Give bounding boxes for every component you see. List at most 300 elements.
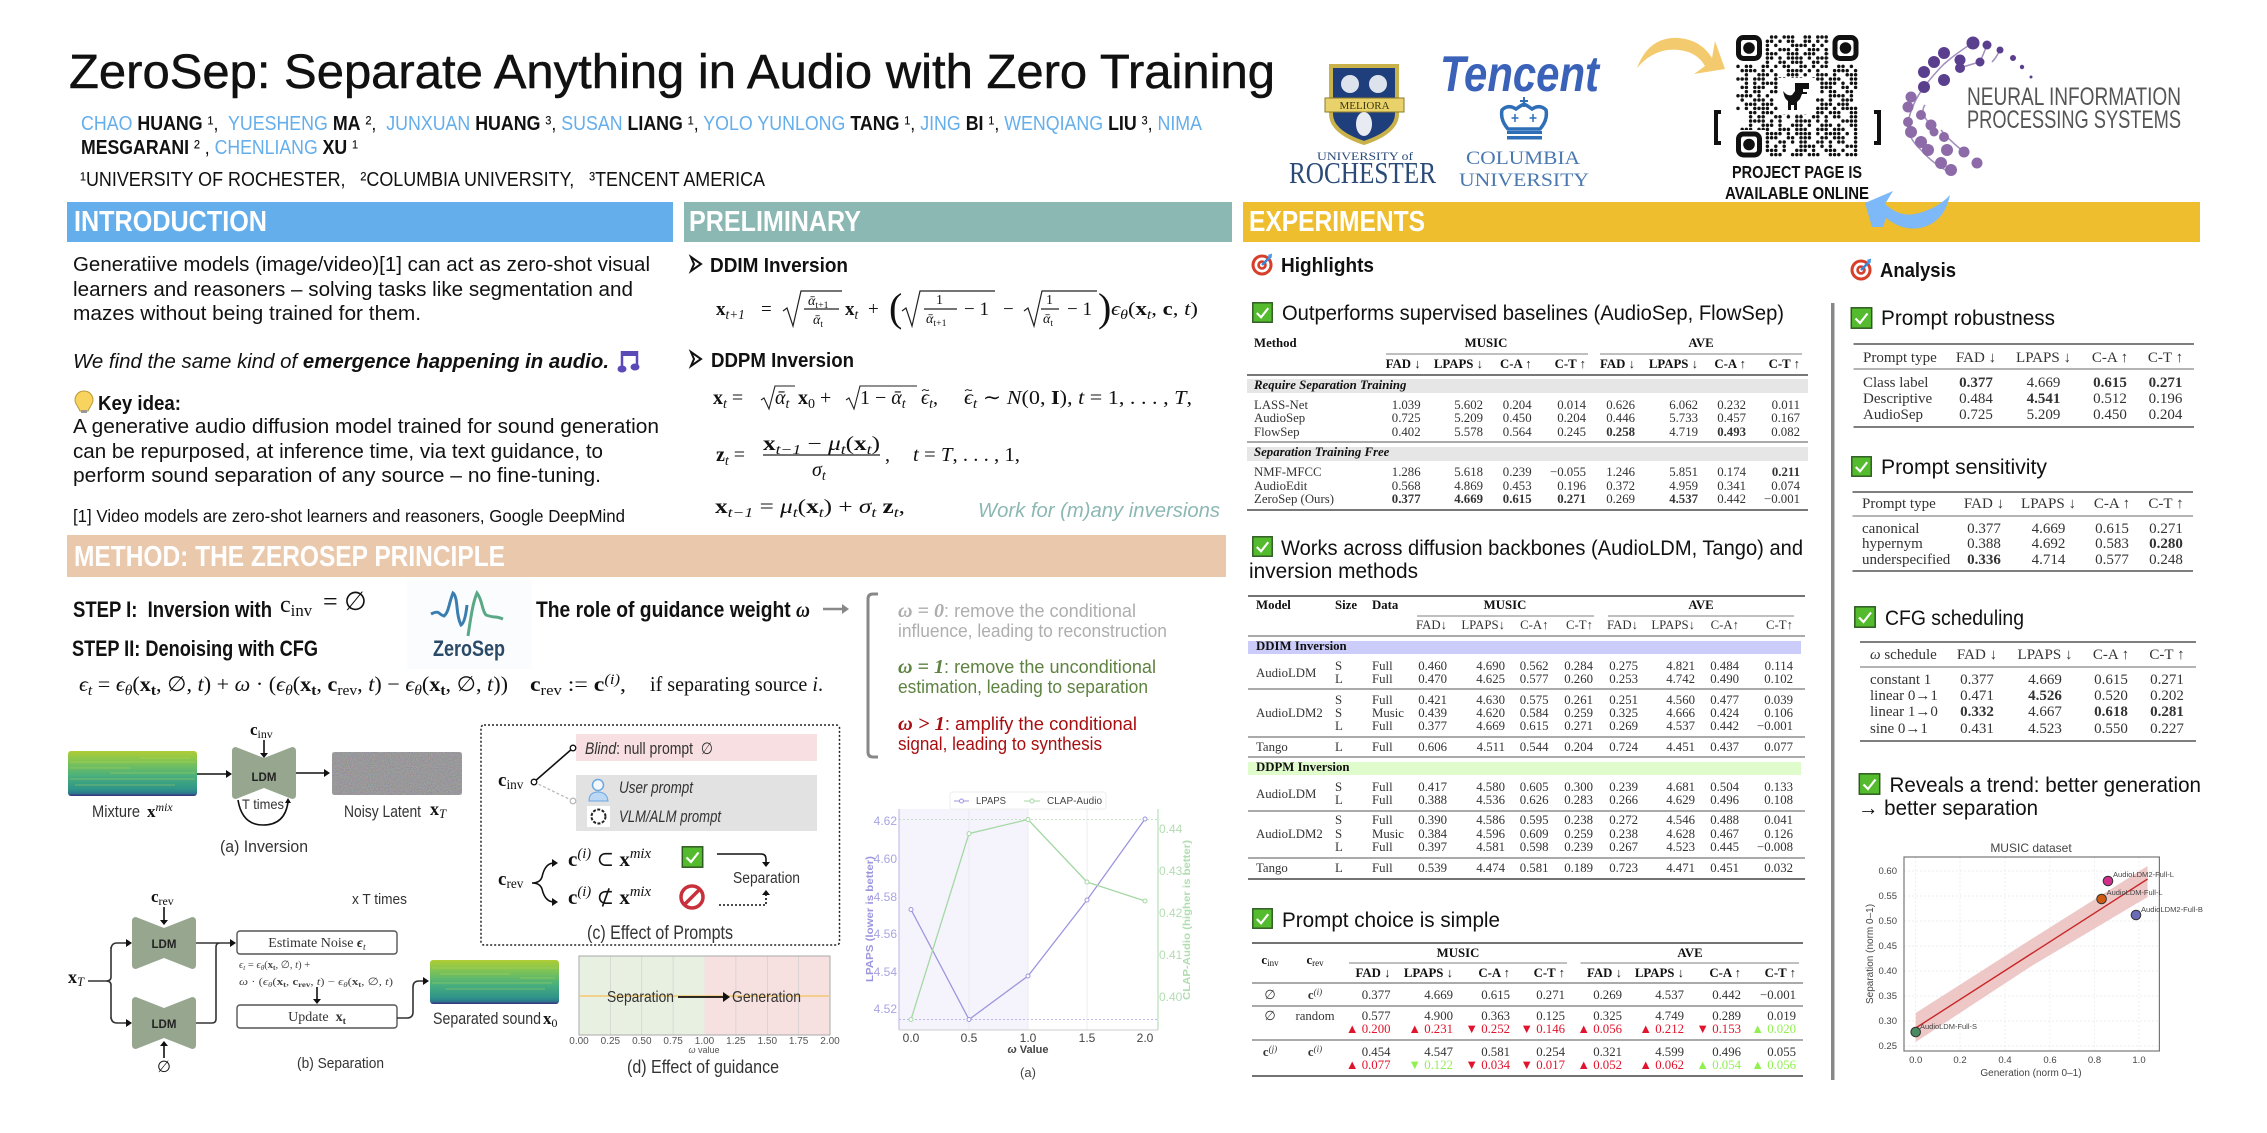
table: prompt sensitivity: Prompt type: [1862, 496, 1936, 512]
heading: introduction: INTRODUCTION: [74, 206, 267, 238]
table: backbones: L: [1335, 740, 1343, 754]
table: prompt choice: 0.577: [1362, 1009, 1391, 1023]
mixture spectrogram: [68, 751, 197, 796]
chart: effect of guidance: 0.75: [663, 1036, 683, 1047]
table: backbones: S: [1335, 780, 1342, 794]
chart: effect of guidance: 0.50: [632, 1036, 652, 1047]
logo: NeurIPS: PROCESSING SYSTEMS: [1967, 106, 2181, 134]
table: prompt robustness: 0.484: [1959, 391, 1993, 407]
table: backbones: 4.560: [1666, 693, 1695, 707]
table: baselines: 1.286: [1392, 465, 1421, 479]
table: backbones: 0.595: [1520, 813, 1548, 827]
callout: work for many inversions: Work for (m)any inversions: [978, 500, 1220, 522]
authors: MESGARANI ² , CHENLIANG XU ¹: [81, 137, 358, 159]
diagram: separation: x: [352, 977, 359, 988]
table: prompt choice: 0.442: [1712, 988, 1741, 1002]
table: baselines: 0.204: [1557, 411, 1587, 425]
diagram: separation: c: [151, 887, 159, 906]
chart: effect of guidance: 2.00: [820, 1036, 840, 1047]
table: prompt choice: c: [1306, 953, 1312, 967]
formula: z_t: x: [763, 433, 776, 455]
text block: key idea body: can be repurposed, at inference time, via text guidance, to: [73, 440, 603, 463]
table: backbones: 0.039: [1764, 693, 1793, 707]
table: backbones: 0.598: [1520, 840, 1548, 854]
formula: CFG: θ: [285, 683, 293, 699]
chart: MUSIC dataset scatter: AudioLDM2-Full-L: [2113, 870, 2174, 879]
table: backbones: 4.474: [1476, 861, 1506, 875]
table: prompt robustness: Prompt type: [1863, 350, 1937, 366]
table: CFG scheduling: 0.550: [2094, 721, 2128, 737]
table: backbones: Data: [1372, 598, 1399, 612]
diagram: separation: x: [277, 977, 284, 988]
panel: introduction: [67, 202, 673, 526]
table: backbones: 4.629: [1666, 793, 1695, 807]
diagram: effect of prompts: c: [568, 847, 577, 871]
diagram: effect of prompts: rev: [506, 876, 524, 891]
table: baselines: 0.232: [1717, 398, 1746, 412]
formula: x_t-1: (: [798, 496, 807, 518]
table: backbones: S: [1335, 827, 1342, 841]
table: baselines: FAD ↓: [1600, 357, 1635, 371]
table: baselines: 0.725: [1392, 411, 1421, 425]
table: backbones: 0.077: [1764, 740, 1794, 754]
diagram: effect of prompts: ⊄: [591, 885, 619, 909]
diagram: separation: (: [348, 977, 353, 988]
formula: DDIM: ϵ: [1111, 299, 1122, 320]
table: baselines: 0.082: [1771, 425, 1800, 439]
table: backbones: 0.390: [1418, 813, 1447, 827]
table: backbones: 0.504: [1710, 780, 1740, 794]
table: prompt choice: ▲ 0.077: [1346, 1058, 1391, 1072]
formula: CFG: ϵ: [116, 672, 126, 696]
table: prompt choice: ▲ 0.062: [1639, 1058, 1684, 1072]
table: backbones: [1248, 596, 1805, 879]
table: backbones: 0.477: [1710, 693, 1740, 707]
table: prompt choice: 4.547: [1424, 1045, 1454, 1059]
table: backbones: 0.283: [1564, 793, 1593, 807]
chart: MUSIC dataset scatter: 0.6: [2043, 1055, 2057, 1066]
text block: intro: mazes without being trained for them.: [73, 302, 421, 325]
table: backbones: 4.620: [1476, 706, 1505, 720]
table: backbones: Full: [1372, 813, 1393, 827]
table: backbones: 4.628: [1666, 827, 1695, 841]
formula: CFG: t: [88, 683, 93, 699]
formula: c_rev: c: [594, 672, 604, 696]
text: reference: [1] Video models are zero-shot learners and reasoners, Google DeepMind: [73, 506, 625, 526]
chart: MUSIC dataset scatter: [1865, 841, 2203, 1079]
guidance weight list: estimation, leading to separation: [898, 677, 1148, 697]
table: prompt choice: [1252, 943, 1803, 1076]
formula: x_t-1: t: [871, 506, 878, 521]
user and VLM prompt box: VLM/ALM prompt: [619, 808, 722, 826]
noisy latent: [332, 752, 462, 795]
text: step I: inv: [291, 601, 313, 620]
table: backbones: 0.239: [1609, 780, 1638, 794]
authors: CHAO HUANG ¹, YUESHENG MA ², JUNXUAN HUANG ³, SUSAN LIANG ¹, YOLO YUNLONG TANG ¹, JING BI ¹, WENQIANG LIU ³, NIMA: [81, 113, 1203, 135]
text block: key idea body: perform sound separation of any source – no fine-tuning.: [73, 464, 601, 487]
line: CLAP-Audio: [909, 818, 1147, 1022]
table: backbones: 0.417: [1418, 780, 1448, 794]
table: baselines: 0.014: [1557, 398, 1587, 412]
legend: CLAP-Audio: [1047, 795, 1102, 807]
table: CFG scheduling: 0.281: [2150, 704, 2184, 720]
formula: z_t: μ: [827, 433, 841, 455]
text: key idea: Key idea:: [98, 392, 181, 415]
chart: omega LPAPS and CLAP: (a): [1020, 1065, 1036, 1080]
diagram: separation: (: [264, 960, 268, 971]
table: baselines: ZeroSep (Ours): [1254, 492, 1334, 506]
table: backbones: 0.575: [1520, 693, 1548, 707]
table: baselines: LASS-Net: [1254, 398, 1308, 412]
table: backbones: FAD↓: [1607, 618, 1638, 632]
blind prompt box: Blind: null prompt ∅: [585, 740, 713, 758]
table: baselines: LPAPS ↓: [1434, 357, 1483, 371]
table: prompt choice: ▼ 0.146: [1520, 1022, 1566, 1036]
table: prompt choice: 0.496: [1712, 1045, 1742, 1059]
chart: MUSIC dataset scatter: 0.30: [1878, 1016, 1897, 1027]
logos: Columbia: COLUMBIA: [1466, 148, 1580, 169]
table: baselines: 6.062: [1669, 398, 1698, 412]
formula: DDIM: t: [1050, 318, 1053, 329]
diagram: separation: x T times: [352, 892, 407, 908]
chart: effect of guidance: 1.00: [695, 1036, 715, 1047]
table: prompt choice: C-T ↑: [1765, 966, 1796, 980]
table: CFG scheduling: constant 1: [1870, 672, 1931, 688]
table: prompt choice: 4.669: [1424, 988, 1453, 1002]
table: prompt choice: ▲ 0.052: [1577, 1058, 1622, 1072]
formula: DDIM: [716, 285, 1198, 330]
table: baselines: 0.174: [1717, 465, 1747, 479]
table: prompt choice: ▲ 0.056: [1751, 1058, 1797, 1072]
table: prompt choice: ▲ 0.054: [1696, 1058, 1742, 1072]
chart: effect of guidance: 1.25: [726, 1036, 746, 1047]
formula: DDIM: x: [1136, 299, 1147, 320]
formula: z_t: −: [801, 433, 828, 455]
diagram: effect of prompts: (i): [577, 846, 591, 862]
table: backbones: 0.421: [1418, 693, 1447, 707]
heading: preliminary: [684, 202, 1232, 242]
table: baselines: 0.457: [1717, 411, 1747, 425]
table: backbones: S: [1335, 659, 1342, 673]
formula: DDPM forward: N(0, I), t = 1, . . . , T,: [1007, 387, 1191, 409]
icon: bulb: [75, 391, 93, 413]
chart: omega LPAPS and CLAP: 0.44: [1159, 822, 1183, 836]
table: baselines: 4.869: [1454, 479, 1483, 493]
diagram: separation: ,: [286, 977, 292, 988]
table: baselines: 0.442: [1717, 492, 1746, 506]
table: backbones: 0.377: [1418, 719, 1448, 733]
formula: z_t: t−1: [776, 443, 801, 458]
diagram: inversion: (a) Inversion: [220, 837, 308, 856]
guidance weight list: ω = 1: remove the unconditional: [898, 656, 1156, 678]
heading: prompt choice: Prompt choice is simple: [1282, 908, 1500, 932]
formula: CFG: ϵ: [79, 672, 90, 696]
table: prompt sensitivity: 0.271: [2149, 521, 2183, 537]
table: prompt choice: ∅: [1264, 1009, 1276, 1023]
formula: DDPM forward: ∼: [977, 387, 1007, 409]
table: prompt choice: c: [1308, 1045, 1314, 1059]
table: prompt sensitivity: 0.388: [1967, 536, 2001, 552]
table: prompt choice: c: [1261, 953, 1267, 967]
table: prompt sensitivity: hypernym: [1862, 536, 1923, 552]
table: backbones: S: [1335, 706, 1342, 720]
table: backbones: 0.609: [1520, 827, 1548, 841]
table: backbones: Full: [1372, 861, 1393, 875]
table: backbones: 0.470: [1418, 672, 1447, 686]
table: backbones: 0.133: [1764, 780, 1793, 794]
chart: MUSIC dataset scatter: Generation (norm 0–1): [1980, 1068, 2082, 1079]
diagram: inversion: x: [147, 802, 156, 821]
chart: omega LPAPS and CLAP: 0.41: [1159, 948, 1183, 962]
diagram: separation: (: [272, 977, 277, 988]
table: backbones: 4.581: [1476, 840, 1505, 854]
table: backbones: 4.523: [1666, 840, 1695, 854]
table: prompt robustness: 0.204: [2149, 407, 2183, 423]
logos: Columbia: UNIVERSITY: [1459, 170, 1589, 191]
table: baselines: Require Separation Training: [1253, 378, 1407, 392]
formula: CFG: t: [311, 683, 316, 699]
table: backbones: Tango: [1256, 740, 1288, 754]
formula: CFG: c: [327, 672, 337, 696]
chart: omega LPAPS and CLAP: 4.52: [874, 1002, 897, 1016]
diagram: effect of prompts: x: [619, 847, 630, 871]
table: prompt robustness: 0.450: [2093, 407, 2127, 423]
text: role of guidance: The role of guidance weight ω: [536, 597, 810, 622]
table: baselines: 5.851: [1669, 465, 1698, 479]
table: prompt choice: FAD ↓: [1356, 966, 1390, 980]
text: DDIM inversion: DDIM Inversion: [710, 254, 848, 277]
table: backbones: 0.437: [1710, 740, 1740, 754]
table: backbones: DDPM Inversion: [1256, 760, 1349, 774]
table: baselines: 5.578: [1454, 425, 1483, 439]
chart: MUSIC dataset scatter: 0.0: [1909, 1055, 1922, 1066]
table: prompt choice: ▲ 0.231: [1408, 1022, 1453, 1036]
table: backbones: 0.724: [1609, 740, 1639, 754]
table: backbones: 0.271: [1564, 719, 1593, 733]
table: prompt sensitivity: 0.280: [2149, 536, 2183, 552]
formula: x_t-1: x: [806, 496, 819, 518]
logos: Tencent: Tencent: [1440, 46, 1601, 102]
chart: MUSIC dataset scatter: 0.8: [2088, 1055, 2101, 1066]
affiliations: ¹UNIVERSITY OF ROCHESTER, ²COLUMBIA UNIVERSITY, ³TENCENT AMERICA: [80, 169, 766, 191]
table: prompt sensitivity: LPAPS ↓: [2021, 496, 2076, 512]
heading: CFG scheduling: CFG scheduling: [1885, 606, 2024, 630]
table: CFG scheduling: 0.615: [2094, 672, 2128, 688]
table: prompt choice: (i): [1314, 987, 1322, 997]
text: step I: STEP I: Inversion with: [73, 597, 272, 622]
table: backbones: 0.388: [1418, 793, 1447, 807]
table: backbones: 4.580: [1476, 780, 1505, 794]
table: CFG scheduling: 0.520: [2094, 688, 2128, 704]
formula: DDPM forward: 0: [808, 397, 815, 412]
formula: CFG: t: [440, 683, 446, 699]
guidance weight list: ω > 1: amplify the conditional: [898, 713, 1137, 735]
table: prompt choice: 0.055: [1767, 1045, 1796, 1059]
table: backbones: 0.032: [1764, 861, 1793, 875]
formula: z_t: z: [716, 444, 725, 466]
formula: x_t-1: σ: [859, 496, 873, 518]
LDM block: LDM: [252, 772, 276, 784]
formula: CFG: t) + ω · (ϵ: [198, 672, 285, 696]
table: backbones: 0.626: [1520, 793, 1549, 807]
logo: NeurIPS: [1902, 36, 2181, 176]
table: prompt choice: LPAPS ↓: [1404, 966, 1453, 980]
heading: experiments: EXPERIMENTS: [1249, 206, 1425, 238]
diagram: separation: [68, 887, 559, 1076]
table: backbones: Full: [1372, 719, 1393, 733]
table: backbones: 0.267: [1609, 840, 1639, 854]
table: prompt sensitivity: 0.577: [2095, 552, 2129, 568]
formula: DDIM: ᾱ: [813, 313, 821, 328]
box: estimate noise: t: [363, 942, 366, 953]
table: baselines: 0.011: [1772, 398, 1800, 412]
formula: DDPM forward: ϵ: [921, 387, 930, 409]
table: backbones: Full: [1372, 693, 1393, 707]
guidance weight list: [868, 594, 1167, 757]
formula: CFG: x: [300, 672, 312, 696]
formula: c_rev: c: [530, 672, 541, 696]
table: prompt sensitivity: C-T ↑: [2148, 496, 2184, 512]
diagram: effect of prompts: c: [498, 869, 506, 890]
table: backbones: C-T↑: [1566, 618, 1593, 632]
diagram: inversion: T times: [242, 796, 284, 812]
table: backbones: Size: [1335, 598, 1357, 612]
table: backbones: 0.260: [1564, 672, 1593, 686]
diagram: separation: c: [292, 977, 299, 988]
guidance weight list: signal, leading to synthesis: [898, 734, 1102, 754]
table: backbones: Music: [1372, 706, 1404, 720]
table: backbones: 0.275: [1609, 659, 1638, 673]
formula: CFG: θ: [125, 683, 132, 699]
table: backbones: 0.451: [1710, 861, 1739, 875]
table: backbones: C-T↑: [1766, 618, 1793, 632]
table: backbones: 0.467: [1710, 827, 1740, 841]
diagram: separation: T: [77, 975, 85, 989]
formula: DDPM forward: t: [786, 397, 790, 412]
diagram: effect of prompts: c: [568, 885, 577, 909]
formula: DDIM: +: [868, 299, 879, 320]
formula: DDIM: − 1: [1067, 299, 1092, 320]
chart: omega LPAPS and CLAP: 0.40: [1159, 990, 1183, 1004]
table: backbones: S: [1335, 693, 1342, 707]
diagram: separation: Separated sound: [433, 1010, 541, 1028]
table: backbones: AudioLDM: [1256, 787, 1316, 801]
chart: effect of guidance: (d) Effect of guidance: [627, 1056, 779, 1077]
formula: DDPM forward: x: [798, 387, 808, 409]
LDM top: [132, 917, 196, 969]
table: backbones: 0.325: [1609, 706, 1638, 720]
table: backbones: 0.439: [1418, 706, 1447, 720]
table: prompt choice: 0.363: [1481, 1009, 1510, 1023]
heading: method: [67, 535, 1226, 577]
table: backbones: Music: [1372, 827, 1404, 841]
table: CFG scheduling: sine 0→1: [1870, 721, 1928, 737]
formula: x_t-1: ) +: [824, 496, 859, 518]
table: baselines: 0.626: [1606, 398, 1636, 412]
formula: x_t-1: z: [883, 496, 894, 518]
logo: ZeroSep: [407, 579, 532, 669]
diagram: effect of prompts: x: [619, 885, 630, 909]
formula: z_t: t: [725, 454, 730, 469]
user and VLM prompt box: [576, 775, 817, 831]
LDM bottom: LDM: [152, 1019, 176, 1031]
formula: z_t: (: [846, 433, 854, 455]
chart: MUSIC dataset scatter: 0.2: [1953, 1055, 1967, 1066]
table: CFG scheduling: C-A ↑: [2093, 647, 2129, 663]
table: baselines: C-T ↑: [1769, 357, 1800, 371]
table: prompt robustness: 4.669: [2027, 375, 2060, 391]
table: backbones: FAD↓: [1416, 618, 1447, 632]
table: CFG scheduling: LPAPS ↓: [2018, 647, 2072, 663]
table: prompt choice: 0.269: [1593, 988, 1622, 1002]
icon: music notes: [618, 351, 640, 372]
legend: LPAPS: [976, 795, 1006, 807]
table: backbones: C-A↑: [1520, 618, 1548, 632]
table: backbones: Full: [1372, 740, 1393, 754]
chart: effect of guidance: 0.00: [569, 1036, 589, 1047]
chart: effect of guidance: Generation: [732, 989, 801, 1006]
formula: DDPM forward: t: [723, 397, 728, 412]
arrow: to guidance list: [823, 604, 849, 614]
table: baselines: MUSIC: [1465, 336, 1507, 350]
text block: emergence: We find the same kind of emergence happening in audio.: [73, 350, 609, 373]
table: CFG scheduling: 0.202: [2150, 688, 2184, 704]
chart: omega LPAPS and CLAP: 4.60: [874, 852, 897, 866]
table: baselines: 4.537: [1669, 492, 1699, 506]
table: backbones: AudioLDM2: [1256, 706, 1323, 720]
table: prompt choice: 4.900: [1424, 1009, 1453, 1023]
formula: x_t-1: x: [715, 496, 728, 518]
formula: DDIM: c, t): [1163, 299, 1197, 320]
table: baselines: 5.618: [1454, 465, 1483, 479]
diagram: separation: 0: [552, 1016, 558, 1030]
table: CFG scheduling: 0.618: [2094, 704, 2128, 720]
formula: DDIM: t: [854, 307, 858, 322]
chart: MUSIC dataset scatter: Separation (norm 0–1): [1865, 904, 1876, 1004]
table: backbones: 4.666: [1666, 706, 1696, 720]
table: prompt choice: 0.289: [1712, 1009, 1741, 1023]
table: backbones: LPAPS↓: [1461, 618, 1505, 632]
chart: omega LPAPS and CLAP: LPAPS (lower is better): [864, 856, 876, 982]
table: backbones: 0.723: [1609, 861, 1638, 875]
formula: c_rev: ,: [620, 672, 626, 696]
formula: DDIM: t+1: [726, 307, 745, 322]
formula: z_t: ): [872, 433, 880, 455]
table: baselines: 0.269: [1606, 492, 1635, 506]
table: backbones: 0.606: [1418, 740, 1448, 754]
diagram: separation: t: [243, 963, 246, 972]
chart: effect of guidance: 0.25: [601, 1036, 621, 1047]
table: backbones: 0.284: [1564, 659, 1594, 673]
table: CFG scheduling: 4.523: [2028, 721, 2062, 737]
table: baselines: FAD ↓: [1386, 357, 1421, 371]
chart: effect of guidance: 1.75: [789, 1036, 809, 1047]
table: prompt robustness: 4.541: [2027, 391, 2060, 407]
table: CFG scheduling: 0.377: [1960, 672, 1994, 688]
diagram: effect of prompts: mix: [630, 846, 652, 862]
table: prompt choice: ▼ 0.153: [1696, 1022, 1741, 1036]
table: prompt choice: C-T ↑: [1534, 966, 1565, 980]
table: prompt choice: LPAPS ↓: [1635, 966, 1684, 980]
table: baselines: 0.245: [1557, 425, 1586, 439]
table: prompt robustness: 0.615: [2093, 375, 2127, 391]
heading: reveals a trend: → better separation: [1858, 796, 2038, 820]
diagram: inversion: Noisy Latent: [344, 803, 421, 821]
heading: experiments: [1243, 202, 2200, 242]
box: update: [237, 1005, 397, 1028]
formula: DDPM forward: =: [727, 387, 748, 409]
formula: DDIM: ): [1098, 285, 1111, 330]
